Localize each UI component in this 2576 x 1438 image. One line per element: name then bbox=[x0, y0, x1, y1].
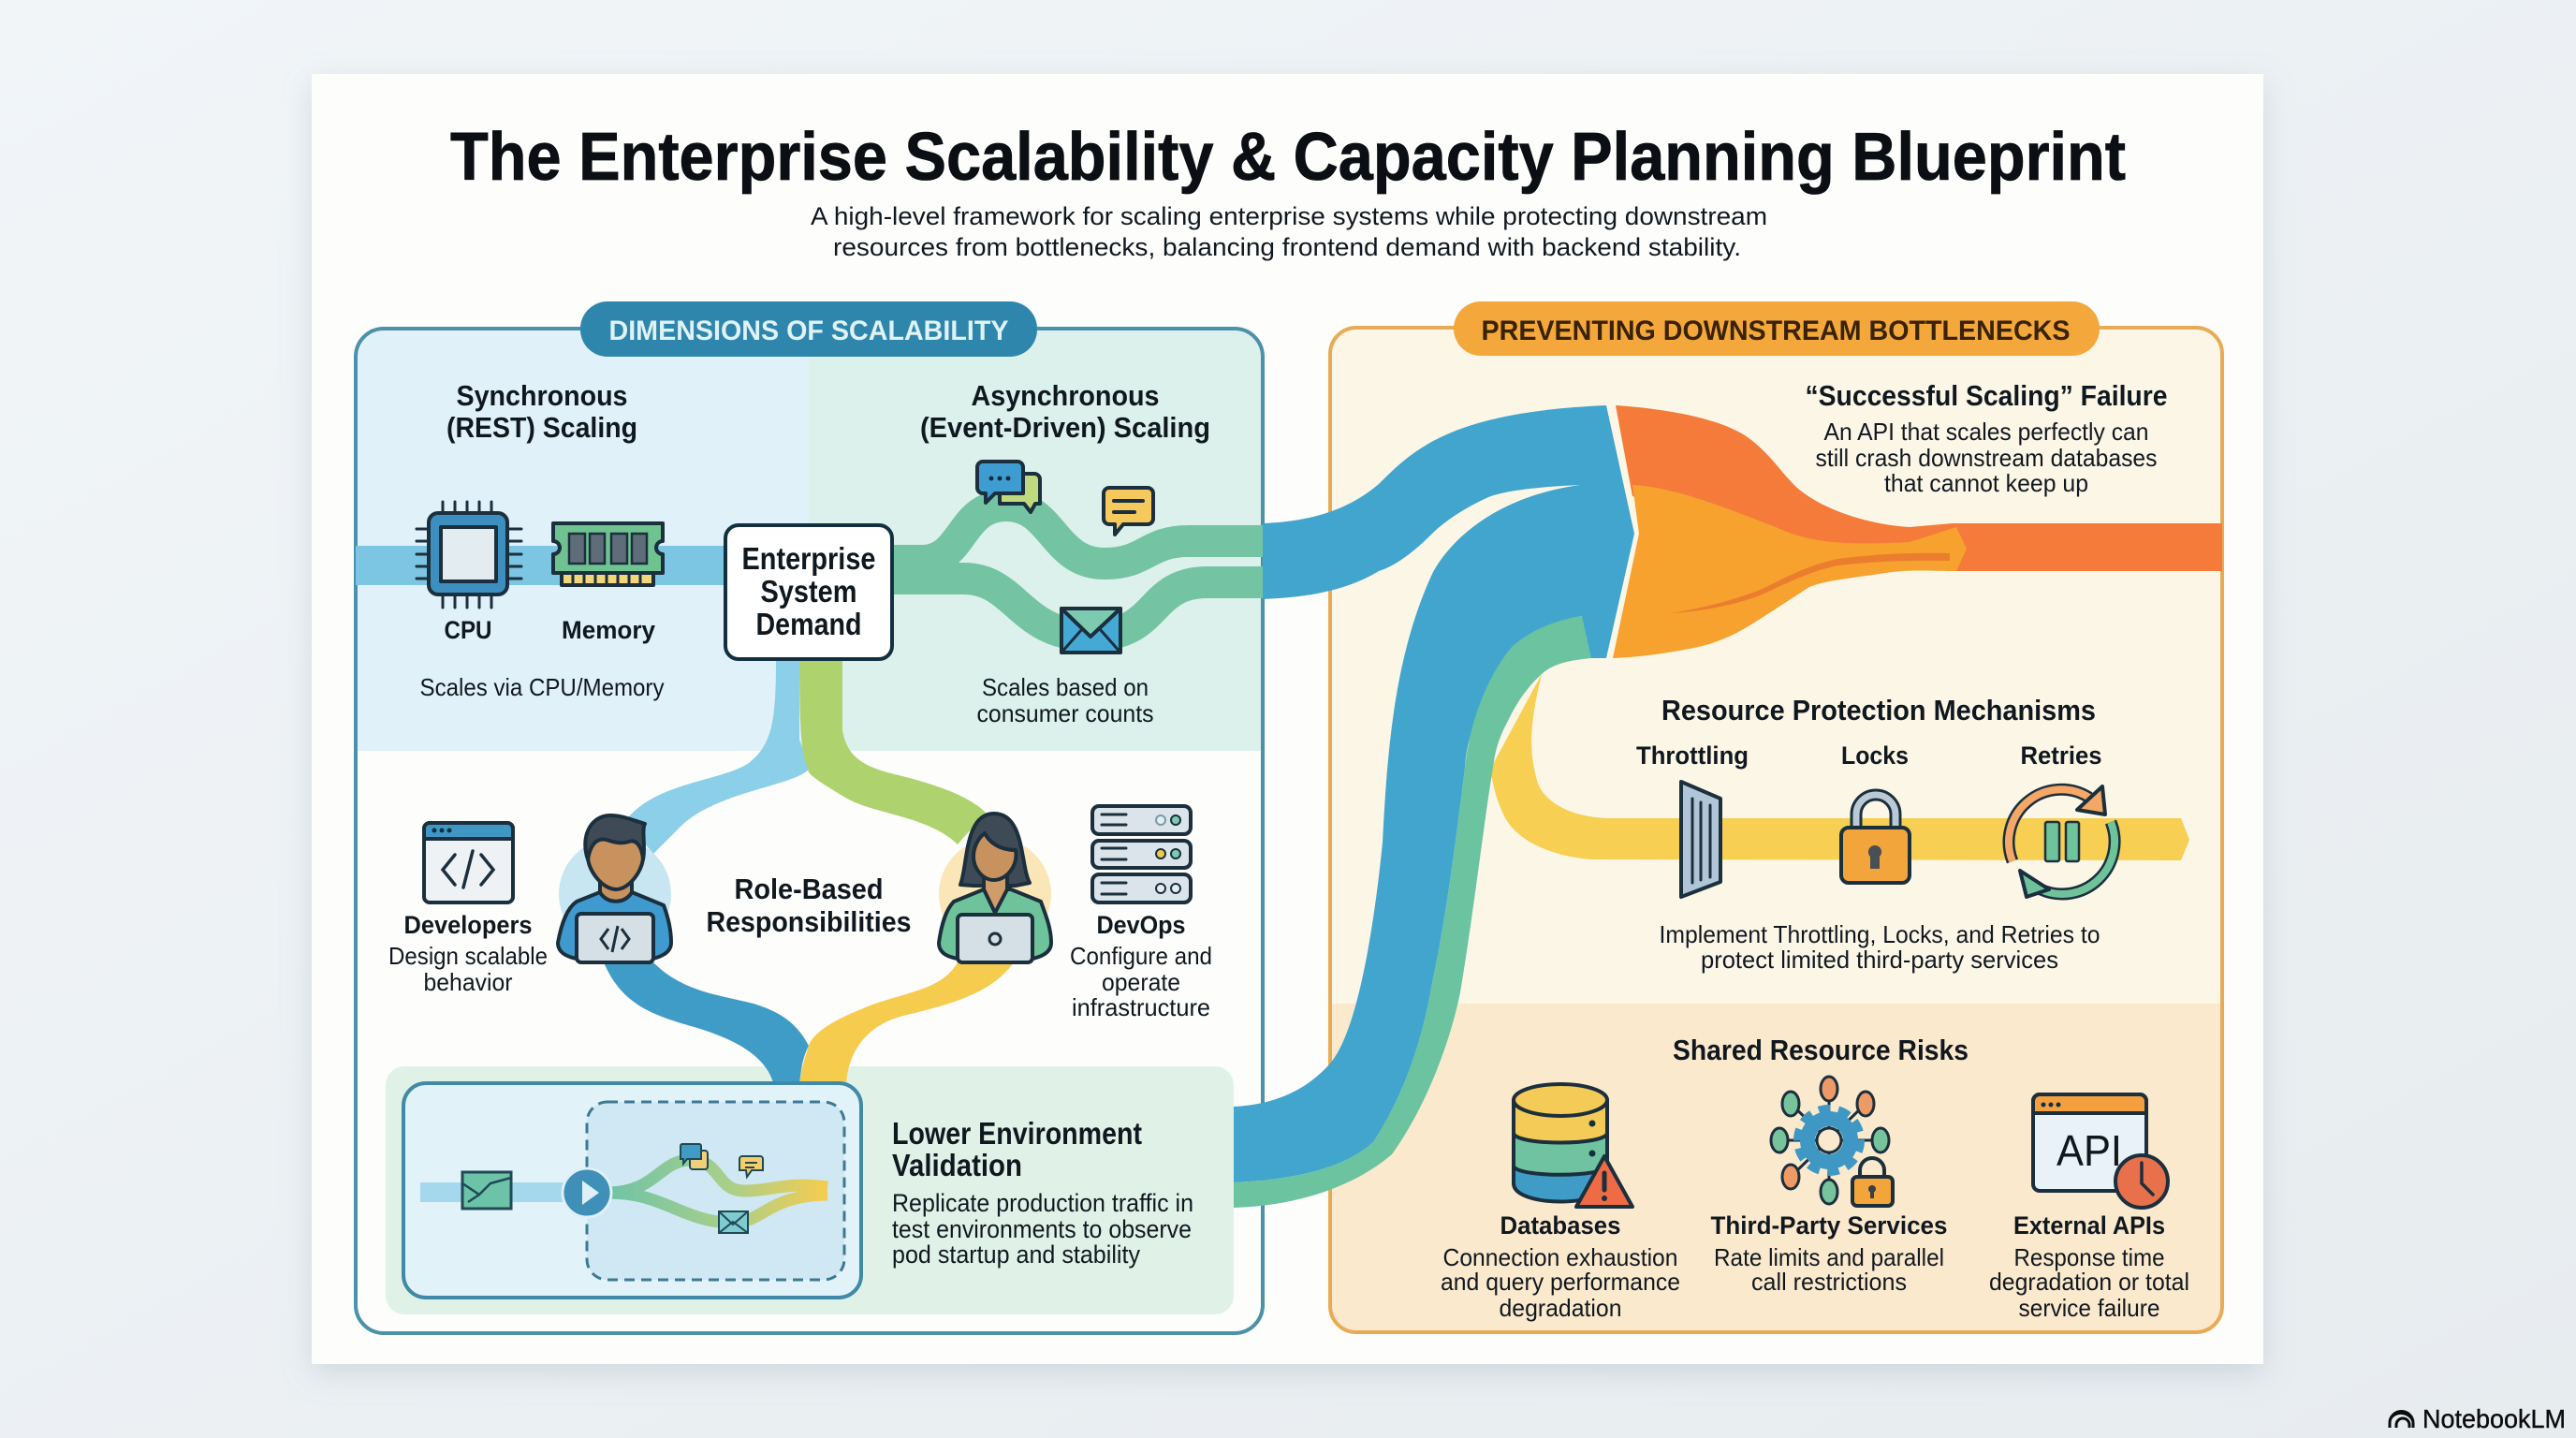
icon: message bbox=[1104, 488, 1153, 535]
labels: mechanisms bbox=[1636, 741, 2102, 770]
text: scales based on consumer counts: consumer counts bbox=[977, 699, 1153, 727]
text: lower environment validation: Validation bbox=[892, 1148, 1022, 1182]
text: databases: degradation bbox=[1500, 1294, 1621, 1322]
icon: code window bbox=[424, 823, 513, 902]
icon: chat bubbles bbox=[977, 462, 1040, 512]
text: implement mechanisms bbox=[1659, 920, 2100, 974]
panel header: preventing downstream bottlenecks: PREVENTING DOWNSTREAM BOTTLENECKS bbox=[1481, 315, 2071, 346]
text: scales based on consumer counts: Scales based on bbox=[982, 673, 1149, 701]
text: developers: behavior bbox=[423, 968, 513, 996]
heading: resource protection mechanisms: Resource Protection Mechanisms bbox=[1661, 694, 2096, 726]
text: successful scaling failure: An API that scales perfectly can bbox=[1823, 418, 2149, 446]
heading: synchronous scaling: (REST) Scaling bbox=[446, 411, 637, 444]
heading: synchronous scaling: Synchronous bbox=[457, 379, 627, 412]
panel header: dimensions of scalability bbox=[580, 301, 1037, 357]
figure: devops engineer bbox=[939, 814, 1051, 962]
subtitle: resources from bottlenecks, balancing frontend demand with backend stability. bbox=[833, 233, 1741, 261]
box: enterprise system demand: System bbox=[760, 574, 857, 609]
text: implement mechanisms: Implement Throttling, Locks, and Retries to bbox=[1659, 920, 2100, 948]
flow: green stream into funnel bbox=[1234, 616, 1591, 1208]
text: devops bbox=[1070, 911, 1212, 1021]
text: implement mechanisms: protect limited third-party services bbox=[1701, 946, 2058, 974]
text: databases: Databases bbox=[1500, 1211, 1621, 1240]
text: devops: DevOps bbox=[1097, 911, 1185, 939]
text: external APIs: service failure bbox=[2018, 1294, 2160, 1322]
labels: mechanisms: Locks bbox=[1841, 741, 1909, 770]
heading: asynchronous scaling bbox=[920, 379, 1210, 444]
text: devops: Configure and bbox=[1070, 942, 1212, 970]
text: devops: operate bbox=[1102, 968, 1180, 996]
text: developers bbox=[388, 911, 548, 996]
labels: mechanisms: Retries bbox=[2020, 741, 2102, 770]
text: lower environment validation: test environments to observe bbox=[892, 1215, 1192, 1243]
icon: memory module bbox=[553, 523, 663, 585]
funnel: bottleneck bbox=[1613, 405, 2222, 658]
flow: demand to developers bbox=[625, 659, 809, 854]
heading: shared resource risks: Shared Resource Risks bbox=[1673, 1034, 1969, 1066]
flow: blue streams into funnel bbox=[1234, 405, 1634, 1182]
flow: synchronous band bbox=[356, 546, 730, 585]
text: scales based on consumer counts bbox=[977, 673, 1153, 727]
text: third-party services: call restrictions bbox=[1751, 1268, 1907, 1296]
text: developers: Developers bbox=[404, 911, 532, 939]
labels: mechanisms: Throttling bbox=[1636, 741, 1749, 770]
icon: external API window: API bbox=[2056, 1126, 2122, 1175]
text: lower environment validation: pod startup and stability bbox=[892, 1240, 1140, 1269]
box: enterprise system demand: Enterprise bbox=[741, 541, 876, 576]
labels: CPU and memory: CPU bbox=[444, 616, 492, 644]
icon: database with warning bbox=[1514, 1084, 1632, 1207]
text: role-based responsibilities: Role-Based bbox=[734, 873, 884, 905]
text: successful scaling failure: “Successful Scaling” Failure bbox=[1805, 379, 2168, 412]
flow: yellow protection stream bbox=[1491, 674, 2189, 860]
panel: preventing downstream bottlenecks bbox=[1330, 328, 2222, 1332]
diagram: validation simulation bbox=[403, 1083, 861, 1298]
text: lower environment validation: Replicate production traffic in bbox=[892, 1189, 1193, 1217]
watermark: NotebookLM: NotebookLM bbox=[2422, 1404, 2566, 1433]
subtitle: A high-level framework for scaling enterprise systems while protecting downstream bbox=[811, 202, 1767, 230]
text: third-party services bbox=[1711, 1211, 1947, 1296]
text: third-party services: Rate limits and parallel bbox=[1714, 1243, 1944, 1271]
text: external APIs: Response time bbox=[2014, 1243, 2164, 1271]
flow: devops to validation bbox=[799, 962, 1014, 1086]
text: role-based responsibilities: Responsibilities bbox=[706, 905, 912, 938]
icon: retries bbox=[2009, 786, 2115, 897]
text: databases bbox=[1441, 1211, 1680, 1322]
text: third-party services: Third-Party Services bbox=[1711, 1211, 1947, 1240]
panel: lower environment validation bbox=[386, 1066, 1234, 1314]
panel header: preventing downstream bottlenecks bbox=[1454, 301, 2100, 356]
text: scales via CPU/memory: Scales via CPU/Memory bbox=[419, 673, 665, 701]
icon: lock bbox=[1841, 795, 1910, 883]
text: external APIs bbox=[1989, 1211, 2189, 1322]
icon: CPU bbox=[417, 502, 521, 608]
flow: developers to validation bbox=[604, 962, 809, 1086]
background card bbox=[312, 74, 2263, 1364]
text: role-based responsibilities bbox=[706, 873, 912, 938]
icon: third-party network bbox=[1771, 1077, 1893, 1206]
text: successful scaling failure: still crash downstream databases bbox=[1816, 444, 2157, 472]
labels: CPU and memory bbox=[444, 616, 655, 644]
figure: developer bbox=[558, 815, 671, 962]
text: external APIs: External APIs bbox=[2013, 1211, 2165, 1240]
subtitle bbox=[811, 202, 1767, 261]
icon: external API window bbox=[2033, 1094, 2168, 1208]
text: lower environment validation: Lower Environment bbox=[892, 1116, 1142, 1151]
text: lower environment validation bbox=[892, 1116, 1193, 1269]
box: enterprise system demand bbox=[725, 525, 892, 659]
text: successful scaling failure: that cannot keep up bbox=[1884, 469, 2088, 497]
text: databases: and query performance bbox=[1441, 1268, 1680, 1296]
text: successful scaling failure bbox=[1805, 379, 2168, 497]
icon: throttle gate bbox=[1681, 782, 1720, 897]
heading: synchronous scaling bbox=[446, 379, 637, 444]
flow: asynchronous streams bbox=[885, 506, 1263, 636]
heading: asynchronous scaling: Asynchronous bbox=[972, 379, 1159, 412]
text: developers: Design scalable bbox=[388, 942, 548, 970]
heading: asynchronous scaling: (Event-Driven) Scaling bbox=[920, 411, 1210, 444]
text: databases: Connection exhaustion bbox=[1443, 1243, 1677, 1271]
text: devops: infrastructure bbox=[1072, 993, 1210, 1021]
icon: envelope bbox=[1061, 609, 1120, 653]
icon: server rack bbox=[1092, 806, 1191, 902]
panel header: dimensions of scalability: DIMENSIONS OF SCALABILITY bbox=[608, 315, 1009, 346]
box: enterprise system demand: Demand bbox=[756, 607, 861, 641]
flow: demand to devops bbox=[799, 659, 986, 844]
title: The Enterprise Scalability & Capacity Planning Blueprint bbox=[450, 120, 2126, 195]
text: external APIs: degradation or total bbox=[1989, 1268, 2189, 1296]
labels: CPU and memory: Memory bbox=[562, 616, 655, 644]
panel: dimensions of scalability bbox=[356, 329, 1263, 1333]
